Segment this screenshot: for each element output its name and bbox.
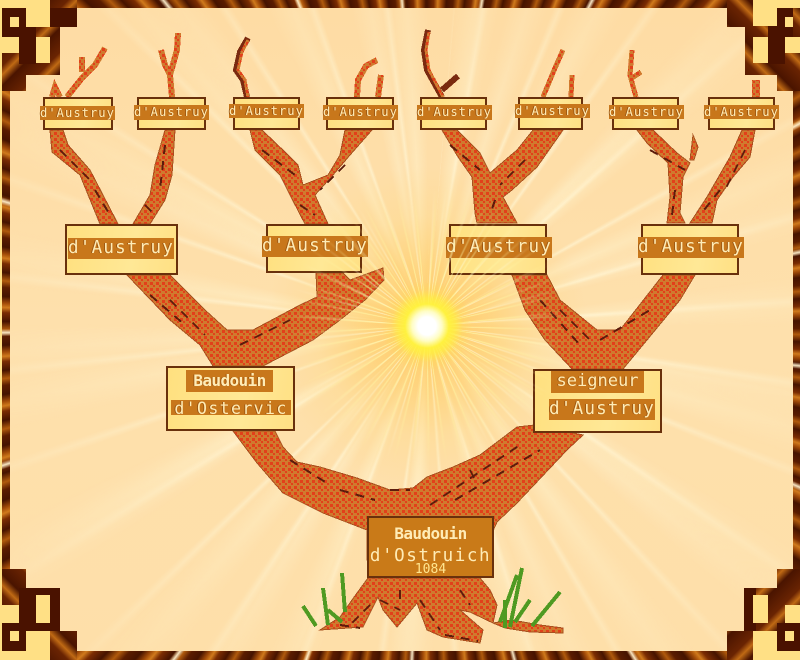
name box: middle row 1: d'Austruy [68,238,174,258]
name box: top row 3: d'Austruy [229,104,304,118]
name box: top row 4: d'Austruy [323,105,398,119]
name box: seigneur d'Austruy [533,369,662,433]
name box: top row 8 [704,97,779,130]
name box: top row 8: d'Austruy [704,105,779,119]
root box: Baudouin d'Ostruich 1084: Baudouin [394,524,467,543]
tree: dark bark streaks [60,145,745,641]
sun rays [296,207,560,438]
name box: middle row 4 [638,224,744,275]
name box: seigneur d'Austruy: seigneur [557,371,638,391]
name box: top row 4 [322,97,398,130]
grass tufts [303,568,560,628]
name box: top row 6 [514,97,590,130]
root box: Baudouin d'Ostruich 1084: d'Ostruich [370,546,491,566]
sun glare [367,266,487,386]
name box: Baudouin d'Ostervic [166,366,295,431]
name box: top row 3 [228,97,304,130]
name box: middle row 2 [262,224,368,273]
root box: Baudouin d'Ostruich 1084 [367,516,494,578]
name box: top row 7 [608,97,684,130]
tree: twig tips above the top row [52,30,756,97]
tree: main limbs and trunk [50,130,755,643]
name box: top row 6: d'Austruy [515,104,590,118]
name box: seigneur d'Austruy: d'Austruy [549,399,655,419]
name box: middle row 2: d'Austruy [262,236,368,256]
name box: top row 5 [416,97,492,130]
name box: top row 2 [134,97,209,130]
name box: middle row 1 [65,224,178,275]
name box: Baudouin d'Ostervic: Baudouin [193,371,266,390]
name box: top row 2: d'Austruy [134,105,209,119]
name box: top row 1 [40,97,115,130]
name box: top row 7: d'Austruy [609,105,684,119]
name box: middle row 4: d'Austruy [638,237,744,257]
name box: Baudouin d'Ostervic: d'Ostervic [174,399,288,418]
name box: middle row 3 [446,224,552,275]
name box: top row 5: d'Austruy [417,105,492,119]
name box: top row 1: d'Austruy [40,106,115,120]
name box: middle row 3: d'Austruy [446,237,552,257]
root box: Baudouin d'Ostruich 1084: 1084 [415,562,446,577]
